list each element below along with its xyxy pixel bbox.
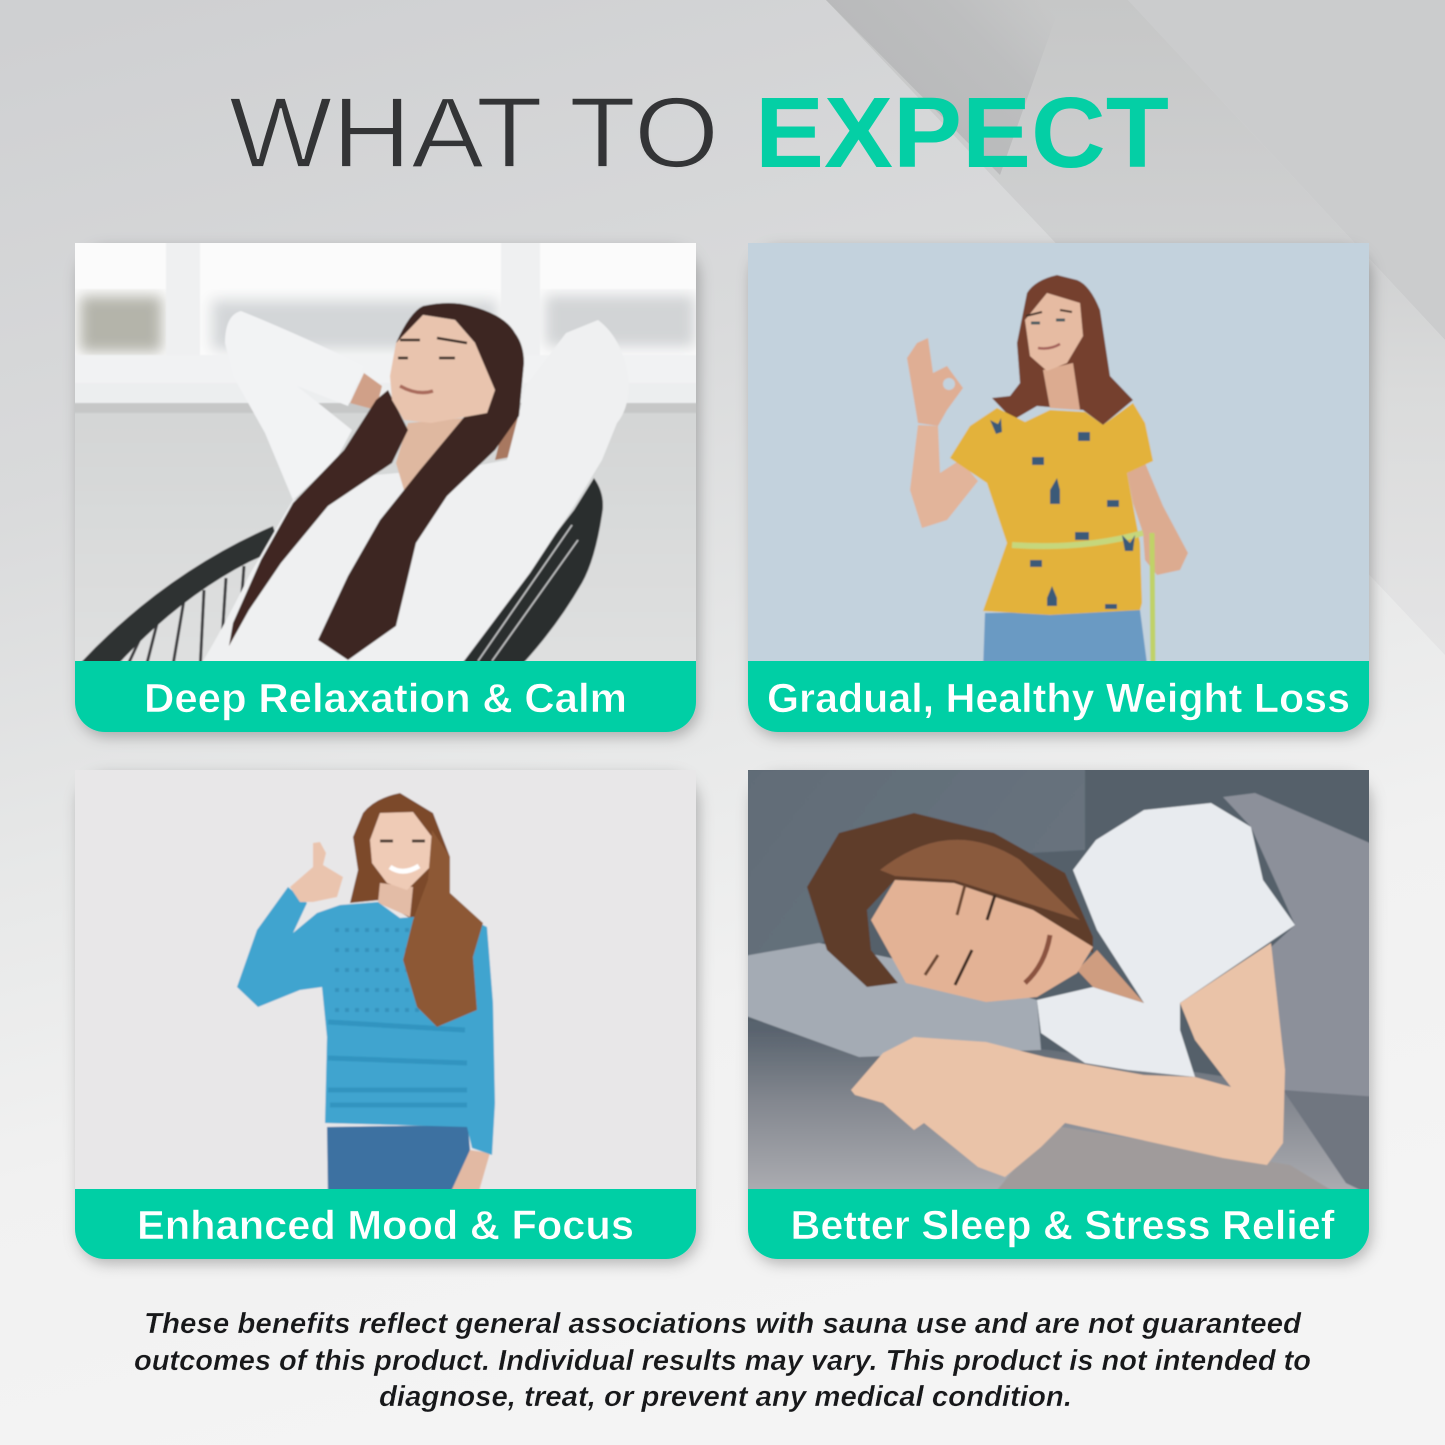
disclaimer bbox=[134, 1308, 1311, 1413]
sweatshirt body bbox=[196, 320, 629, 673]
jeans bbox=[327, 1125, 470, 1198]
right hair strand and crown bbox=[318, 303, 524, 660]
blanket bbox=[1223, 792, 1369, 1097]
left hair strand bbox=[229, 390, 408, 646]
main pillow bbox=[738, 943, 1041, 1057]
face bbox=[871, 880, 1093, 1002]
tape bbox=[1012, 533, 1143, 546]
sweater bbox=[237, 887, 495, 1155]
jeans bbox=[982, 610, 1148, 661]
label: Gradual, Healthy Weight Loss bbox=[767, 675, 1350, 721]
disclaimer: outcomes of this product. Individual results may vary. This product is not intended to bbox=[134, 1345, 1311, 1377]
neck bbox=[378, 883, 413, 917]
disclaimer: diagnose, treat, or prevent any medical condition. bbox=[379, 1381, 1072, 1413]
photo: woman measuring waist bbox=[738, 233, 1379, 671]
chair spokes bbox=[125, 566, 244, 671]
panel: weight loss bbox=[738, 233, 1379, 732]
lower hand bbox=[450, 1150, 490, 1189]
title: EXPECT bbox=[755, 77, 1169, 189]
hair front bbox=[403, 830, 483, 1027]
disclaimer: These benefits reflect general associations with sauna use and are not guaranteed bbox=[144, 1308, 1302, 1340]
panel: deep relaxation bbox=[65, 233, 706, 732]
hair back bbox=[350, 793, 450, 920]
left arm bbox=[910, 425, 978, 528]
hair bbox=[992, 275, 1133, 425]
label: Deep Relaxation & Calm bbox=[144, 675, 627, 721]
chair bbox=[81, 526, 276, 661]
right arm bbox=[1127, 463, 1188, 575]
neck bbox=[396, 418, 464, 490]
face bbox=[390, 315, 495, 423]
upper pillow bbox=[738, 765, 1085, 957]
photo: woman relaxing in chair bbox=[65, 233, 706, 673]
neck bbox=[1043, 363, 1080, 410]
panel: mood and focus bbox=[65, 760, 706, 1259]
shirt pattern bbox=[990, 418, 1135, 609]
shirt bbox=[1037, 803, 1295, 1077]
skin at wrists bbox=[350, 373, 382, 410]
hair bbox=[807, 813, 1093, 987]
arms bbox=[851, 943, 1285, 1177]
neck bbox=[1077, 950, 1144, 1003]
photo: woman sleeping bbox=[738, 760, 1379, 1199]
face bbox=[370, 812, 432, 890]
bottom sheet bbox=[748, 1036, 1360, 1189]
photo: woman thumbs up bbox=[65, 760, 706, 1199]
title bbox=[229, 77, 1169, 189]
hand bbox=[907, 338, 963, 426]
panel: better sleep bbox=[738, 760, 1379, 1259]
shirt bbox=[950, 403, 1153, 615]
label: Enhanced Mood & Focus bbox=[137, 1202, 634, 1248]
label: Better Sleep & Stress Relief bbox=[790, 1202, 1335, 1248]
thumb up hand bbox=[290, 842, 343, 902]
face bbox=[1025, 293, 1083, 371]
title: WHAT TO bbox=[229, 77, 719, 189]
